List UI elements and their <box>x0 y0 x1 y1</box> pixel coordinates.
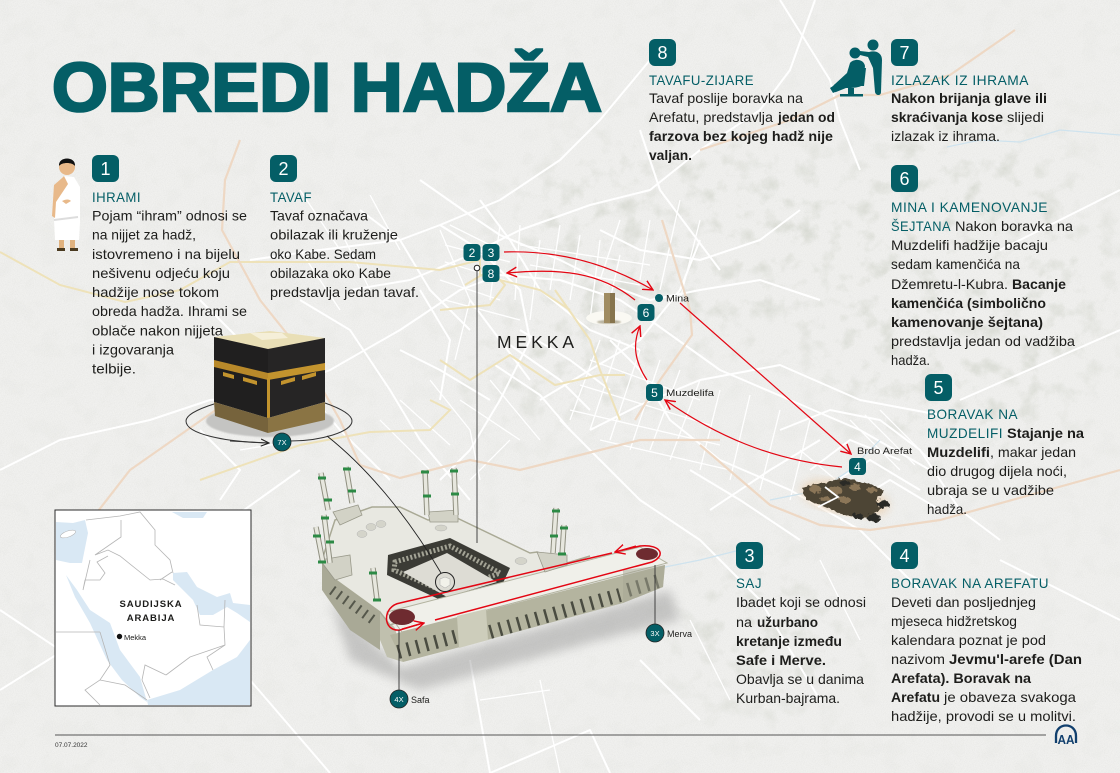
step 5: boravak na muzdelifi: BORAVAK NA <box>927 406 1018 422</box>
badge 6 <box>891 165 918 192</box>
step 6: mina i kamenovanje sejtana: Džemretu-l-Kubra. <box>891 276 1008 292</box>
step 2: tavaf: predstavlja jedan tavaf. <box>270 284 419 300</box>
step 1: ihrami <box>92 155 247 376</box>
badge 4 <box>891 542 918 569</box>
badge 3: 3 <box>744 546 755 566</box>
step 5: boravak na muzdelifi: dio drugog dijela noći, <box>927 463 1067 479</box>
step 2: tavaf <box>270 155 419 300</box>
step 3: saj: Safe i Merve. <box>736 652 826 668</box>
badge 3 <box>736 542 763 569</box>
marker 4 <box>849 458 866 475</box>
label saudijska arabija <box>120 599 182 624</box>
badge 5 <box>925 374 952 401</box>
label saudijska arabija: ARABIJA <box>127 613 175 624</box>
step 5: boravak na muzdelifi: , makar jedan <box>990 444 1076 460</box>
step 1: ihrami: Pojam “ihram” odnosi se <box>92 208 247 224</box>
badge 7x: 7X <box>277 438 287 447</box>
route arrows <box>504 252 851 467</box>
step 1: ihrami: oblače nakon nijjeta <box>92 322 223 338</box>
marker 2 <box>464 244 480 261</box>
step 8: tavafu-zijare: Arefatu, predstavlja <box>649 109 773 125</box>
step 8: tavafu-zijare: jedan od <box>777 109 835 125</box>
map markers <box>464 244 912 475</box>
step 6: mina i kamenovanje sejtana: Muzdelifi hadžije bacaju <box>891 237 1048 253</box>
step 4: boravak na arefatu: hadžije, provodi se u molitvi. <box>891 708 1076 724</box>
label muzdelifa: Muzdelifa <box>666 388 715 399</box>
step 6: mina i kamenovanje sejtana: hadža. <box>891 352 930 368</box>
step 3: saj: Ibadet koji se odnosi <box>736 594 866 610</box>
step 4: boravak na arefatu: Deveti dan posljednjeg <box>891 594 1036 610</box>
kaaba with tawaf circle <box>186 331 352 451</box>
orange highways <box>60 30 1120 560</box>
step 6: mina i kamenovanje sejtana: Nakon boravka na <box>955 218 1073 234</box>
step 4: boravak na arefatu <box>891 542 1082 724</box>
marker 4: 4 <box>854 460 861 474</box>
step 5: boravak na muzdelifi <box>925 374 1084 517</box>
borders <box>56 512 225 705</box>
label: merva <box>646 565 692 642</box>
domes <box>357 520 527 564</box>
grand mosque model <box>313 467 680 690</box>
label: merva: Merva <box>667 629 692 639</box>
badge 8: 8 <box>657 43 668 63</box>
step 4: boravak na arefatu: mjeseca hidžretskog <box>891 613 1017 629</box>
step 6: mina i kamenovanje sejtana: kamenčića (simbolično <box>891 295 1046 311</box>
leader line: kaaba to mosque <box>327 436 441 573</box>
leader line: mosque to map marker <box>474 265 480 543</box>
yellow roads <box>0 252 625 480</box>
badge 6: 6 <box>899 169 910 189</box>
step 6: mina i kamenovanje sejtana: sedam kamenčića na <box>891 256 1020 272</box>
roof <box>322 507 590 625</box>
label: merva: 3X <box>650 629 660 638</box>
step 4: boravak na arefatu: Jevmu'l-arefe (Dan <box>949 651 1082 667</box>
label brdo arefat: Brdo Arefat <box>857 446 912 457</box>
step 5: boravak na muzdelifi: hadža. <box>927 501 967 517</box>
step 8: tavafu-zijare: TAVAFU-ZIJARE <box>649 72 754 88</box>
step 3: saj: SAJ <box>736 575 762 591</box>
step 7: izlazak iz ihrama: izlazak iz ihrama. <box>891 128 1000 144</box>
marker 5 <box>646 384 663 401</box>
step 3: saj: na <box>736 614 752 630</box>
icon: mount arafat <box>799 474 891 522</box>
kaaba marker <box>436 572 454 592</box>
step 6: mina i kamenovanje sejtana: ŠEJTANA <box>891 218 951 234</box>
label: safa: Safa <box>411 695 430 705</box>
step 1: ihrami: istovremeno i na bijelu <box>92 246 240 262</box>
step 8: tavafu-zijare: valjan. <box>649 147 692 163</box>
step 2: tavaf: Tavaf označava <box>270 208 368 224</box>
label: safa <box>390 630 430 708</box>
label: safa: 4X <box>394 695 404 704</box>
minarets <box>316 467 564 600</box>
step 4: boravak na arefatu: kalendara poznat je pod <box>891 632 1046 648</box>
step 2: tavaf: obilazak ili kruženje <box>270 227 398 243</box>
badge 1: 1 <box>100 159 111 179</box>
marker mina: Mina <box>666 294 690 304</box>
step 6: mina i kamenovanje sejtana <box>891 165 1075 368</box>
rivers <box>650 130 1120 570</box>
marker 3 <box>482 244 500 261</box>
step 2: tavaf: obilazaka oko Kabe <box>270 265 391 281</box>
safa and merva platforms <box>389 609 415 625</box>
step 1: ihrami: obreda hadža. Ihrami se <box>92 303 247 319</box>
step 8: tavafu-zijare: farzova bez kojeg hadž nije <box>649 128 833 144</box>
step 7: izlazak iz ihrama: IZLAZAK IZ IHRAMA <box>891 72 1029 88</box>
step 8: tavafu-zijare <box>649 39 835 163</box>
label: mekka: MEKKA <box>497 332 574 352</box>
marker 3: 3 <box>488 246 495 260</box>
badge 2 <box>270 155 297 182</box>
badge 7 <box>891 39 918 66</box>
step 6: mina i kamenovanje sejtana: MINA I KAMENOVANJE <box>891 199 1048 215</box>
marker 6: 6 <box>643 306 650 320</box>
step 7: izlazak iz ihrama: skraćivanja kose <box>891 109 1003 125</box>
icon: barber and seated pilgrim <box>830 40 882 96</box>
step 3: saj: kretanje između <box>736 633 842 649</box>
step 4: boravak na arefatu: Arefata). Boravak na <box>891 670 1031 686</box>
badge 1 <box>92 155 119 182</box>
marker 6 <box>638 304 654 321</box>
step 3: saj <box>736 542 866 706</box>
step 5: boravak na muzdelifi: Stajanje na <box>1007 425 1084 441</box>
step 1: ihrami: IHRAMI <box>92 189 141 205</box>
step 7: izlazak iz ihrama: slijedi <box>1007 109 1044 125</box>
step 6: mina i kamenovanje sejtana: kamenovanje šejtana) <box>891 314 1043 330</box>
step 4: boravak na arefatu: Arefatu <box>891 689 940 705</box>
badge 4: 4 <box>899 546 910 566</box>
red sa'y route <box>386 546 660 630</box>
step 1: ihrami: telbije. <box>92 360 136 376</box>
title: OBREDI HADŽA <box>52 49 602 126</box>
step 6: mina i kamenovanje sejtana: Bacanje <box>1012 276 1066 292</box>
side walls <box>322 560 380 650</box>
step 5: boravak na muzdelifi: ubraja se u vadžibe <box>927 482 1054 498</box>
step 6: mina i kamenovanje sejtana: predstavlja jedan od vadžiba <box>891 333 1075 349</box>
courtyard <box>387 538 510 603</box>
step 1: ihrami: i izgovaranja <box>92 342 174 358</box>
step 5: boravak na muzdelifi: MUZDELIFI <box>927 425 1003 441</box>
step 3: saj: užurbano <box>757 614 818 630</box>
icon: agency logo: AA <box>1058 732 1075 747</box>
step 3: saj: Obavlja se u danima <box>736 671 864 687</box>
icon: agency logo <box>1056 726 1076 747</box>
step 2: tavaf: TAVAF <box>270 189 312 205</box>
marker 8 <box>482 265 500 282</box>
icon: jamarat pillar <box>586 293 632 325</box>
step 2: tavaf: oko Kabe. Sedam <box>270 246 376 262</box>
sa'y corridor <box>387 547 667 632</box>
badge 7: 7 <box>899 43 910 63</box>
footer date: 07.07.2022 <box>55 742 88 749</box>
step 4: boravak na arefatu: nazivom <box>891 651 945 667</box>
step 7: izlazak iz ihrama: Nakon brijanja glave ili <box>891 90 1047 106</box>
marker 5: 5 <box>651 386 658 400</box>
marker mina <box>655 294 690 304</box>
step 8: tavafu-zijare: Tavaf poslije boravka na <box>649 90 803 106</box>
label saudijska arabija: SAUDIJSKA <box>120 599 182 610</box>
inset locator map <box>55 510 251 706</box>
marker 2: 2 <box>469 246 476 260</box>
badge 2: 2 <box>278 159 289 179</box>
marker mekka: Mekka <box>124 633 147 642</box>
step 4: boravak na arefatu: je obaveza svakoga <box>943 689 1076 705</box>
step 4: boravak na arefatu: BORAVAK NA AREFATU <box>891 575 1049 591</box>
step 1: ihrami: nešivenu odjeću koju <box>92 265 230 281</box>
icon: pilgrim in ihram <box>52 158 80 251</box>
badge 8 <box>649 39 676 66</box>
step 3: saj: Kurban-bajrama. <box>736 690 840 706</box>
minaret bases <box>320 505 567 580</box>
seas <box>56 512 250 705</box>
step 1: ihrami: na nijjet za hadž, <box>92 227 196 243</box>
badge 5: 5 <box>933 378 944 398</box>
arcade wall <box>390 565 665 662</box>
marker 8: 8 <box>488 267 495 281</box>
step 1: ihrami: hadžije nose tokom <box>92 284 219 300</box>
step 7: izlazak iz ihrama <box>891 39 1047 144</box>
badge 7x <box>273 433 291 451</box>
step 5: boravak na muzdelifi: Muzdelifi <box>927 444 990 460</box>
